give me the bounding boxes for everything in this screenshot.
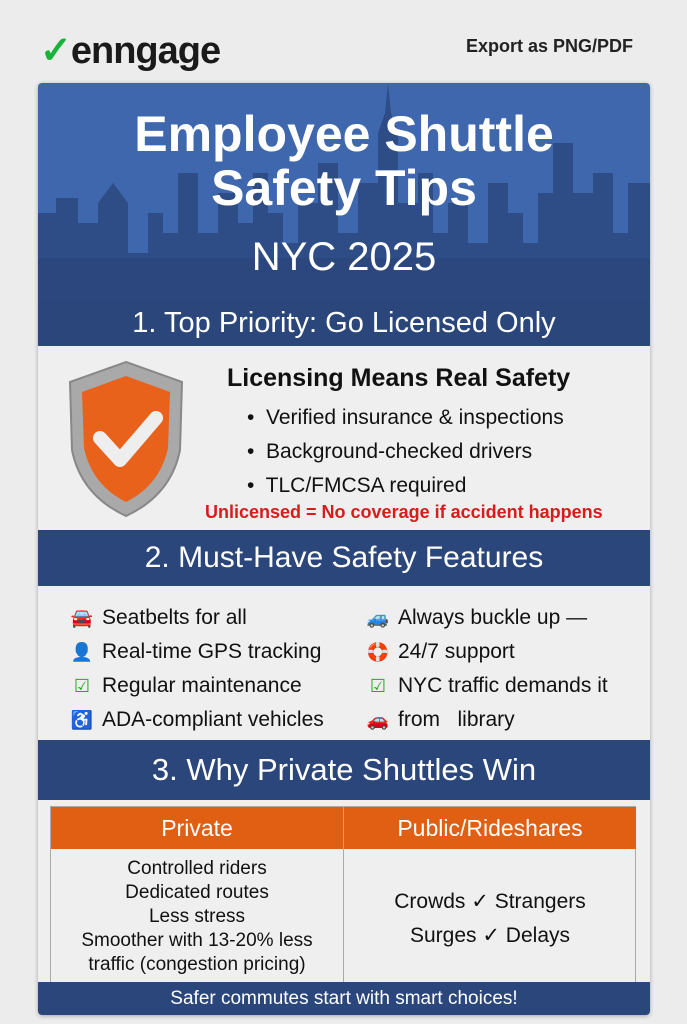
features list: 🚗 <box>367 710 389 730</box>
features list: ♿ <box>71 710 93 730</box>
features list: NYC traffic demands it <box>398 674 608 697</box>
header private: Private <box>161 815 233 841</box>
section 1 heading: 1. Top Priority: Go Licensed Only <box>132 307 556 339</box>
text: • Verified insurance & inspections <box>247 406 564 429</box>
section 3 heading <box>38 740 650 800</box>
features list: 👤 <box>71 642 93 662</box>
features list: 🛟 <box>367 642 389 662</box>
header private <box>51 807 343 849</box>
features list: Regular maintenance <box>102 674 302 697</box>
section 2 heading: 2. Must-Have Safety Features <box>145 541 543 574</box>
text: • Background-checked drivers <box>247 440 532 463</box>
features list: from library <box>398 708 515 731</box>
header public: Public/Rideshares <box>397 815 583 841</box>
features list: 24/7 support <box>398 640 515 663</box>
title: Employee Shuttle <box>134 106 554 162</box>
private list: Controlled riders <box>127 858 267 879</box>
features list: Seatbelts for all <box>102 606 247 629</box>
header panel <box>38 83 650 300</box>
features list: ☑ <box>74 676 90 696</box>
title <box>134 106 554 216</box>
private list <box>81 858 313 975</box>
features list: Always buckle up — <box>398 606 587 629</box>
text: Unlicensed = No coverage if accident happens <box>205 502 603 522</box>
footer banner: Safer commutes start with smart choices! <box>170 988 518 1009</box>
private list: Smoother with 13-20% less <box>81 930 313 951</box>
public list: Crowds ✓ Strangers <box>394 890 586 913</box>
footer banner <box>38 982 650 1015</box>
public list <box>394 890 586 947</box>
icon: shield <box>69 361 183 517</box>
features list: ADA-compliant vehicles <box>102 708 324 731</box>
comparison table <box>50 806 636 984</box>
logo: ✓enngage <box>40 30 220 72</box>
subtitle: NYC 2025 <box>252 235 436 279</box>
export label: Export as PNG/PDF <box>466 36 633 56</box>
text: Licensing Means Real Safety <box>227 364 570 392</box>
private list: traffic (congestion pricing) <box>88 954 306 975</box>
section 1 heading <box>38 300 650 346</box>
header public <box>344 807 636 849</box>
public list: Surges ✓ Delays <box>410 924 570 947</box>
private list: Dedicated routes <box>125 882 269 903</box>
section 3 heading: 3. Why Private Shuttles Win <box>152 752 536 787</box>
features list: 🚘 <box>71 608 93 628</box>
section 2 heading <box>38 530 650 586</box>
features list <box>71 606 608 731</box>
title: Safety Tips <box>211 160 477 216</box>
private list: Less stress <box>149 906 245 927</box>
skyline <box>38 84 650 300</box>
features list: ☑ <box>370 676 386 696</box>
text: • TLC/FMCSA required <box>247 474 466 497</box>
features list: 🚙 <box>367 608 389 628</box>
features list: Real-time GPS tracking <box>102 640 321 663</box>
licensing text block <box>205 364 603 522</box>
